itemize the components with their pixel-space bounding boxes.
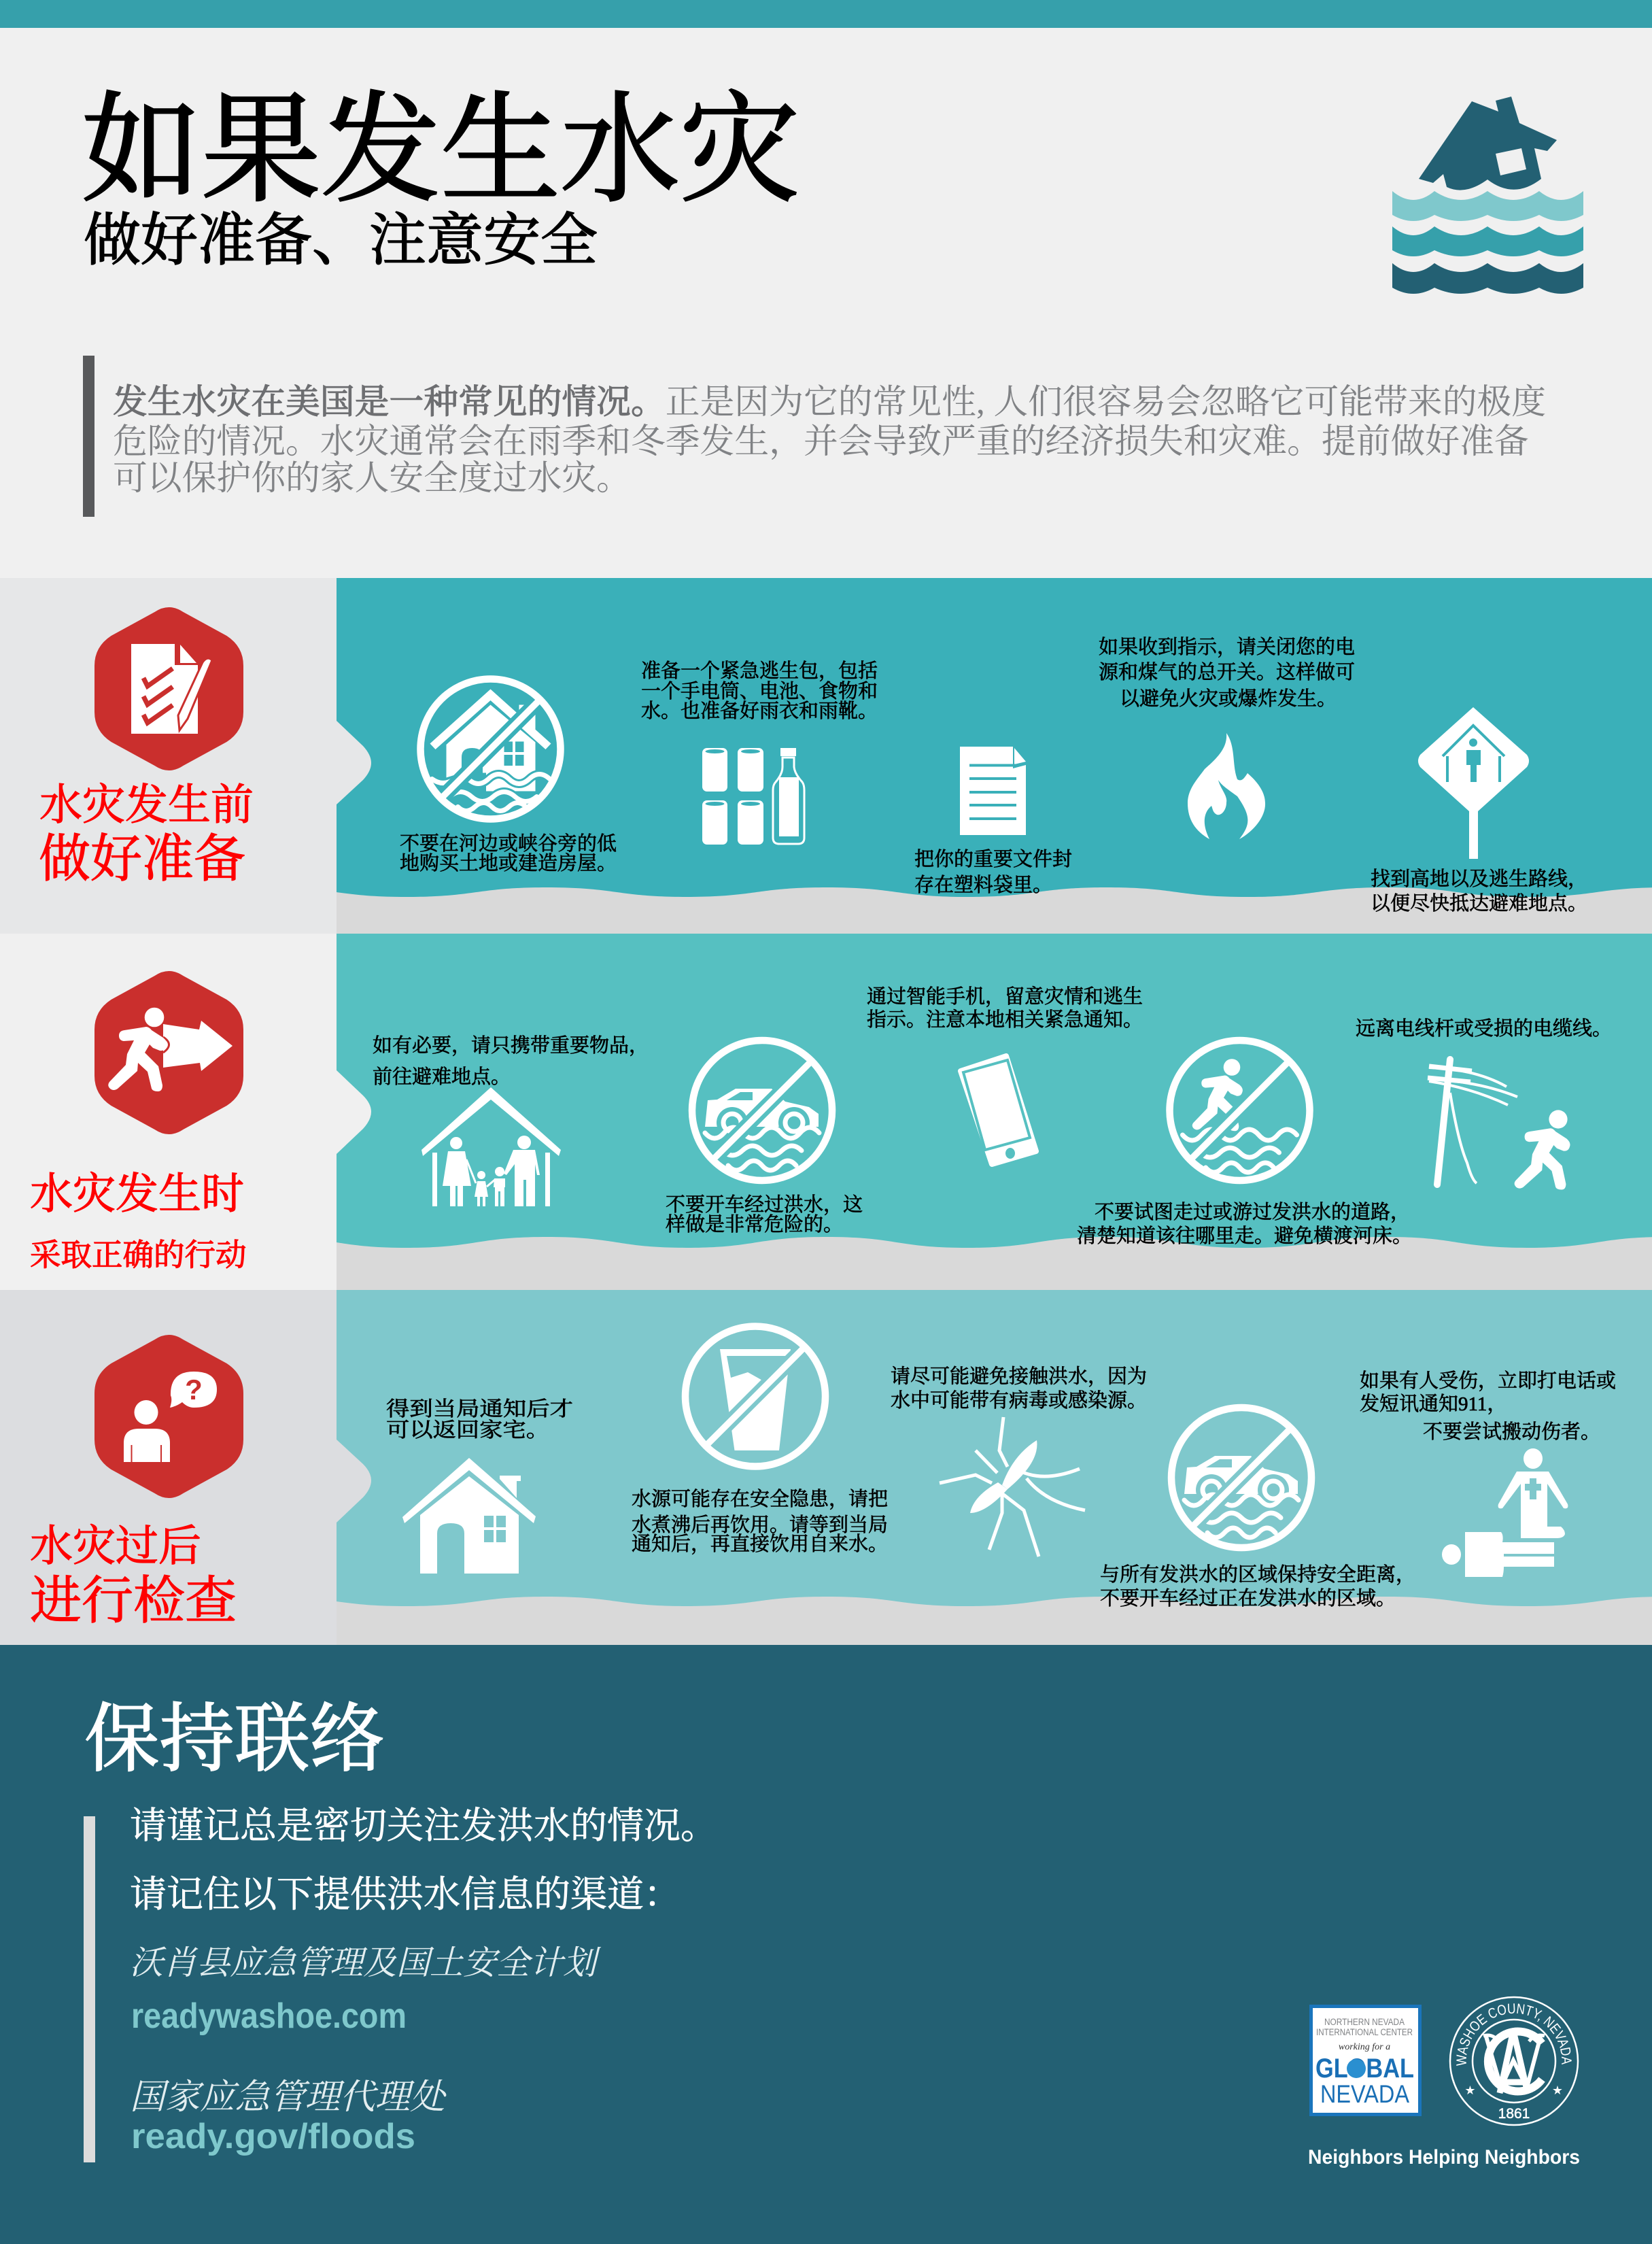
- subheading: 采取正确的行动: [30, 1238, 247, 1272]
- text: call 911: 不要尝试搬动伤者。: [1423, 1421, 1600, 1443]
- text: shut off utilities: 如果收到指示，请关闭您的电: [1099, 636, 1355, 658]
- text: do not build: 不要在河边或峡谷旁的低: [400, 833, 617, 855]
- icon: no driving: [1171, 1408, 1311, 1548]
- text: do not drive: 样做是非常危险的。: [666, 1213, 843, 1236]
- icon: evacuation sign: [1418, 707, 1529, 859]
- text: smartphone alerts: 指示。注意本地相关紧急通知。: [867, 1008, 1143, 1031]
- badge: person asking: ?: [185, 1374, 203, 1406]
- text: boil water: 通知后，再直接饮用自来水。: [632, 1533, 888, 1555]
- text: return home: 可以返回家宅。: [386, 1419, 549, 1442]
- footer heading: 保持联络: [84, 1698, 385, 1781]
- logo: Washoe County seal: ★: [1552, 2084, 1563, 2098]
- panel: after flood: [0, 1290, 1652, 1645]
- badge: person asking: [94, 1335, 243, 1498]
- heading large: 做好准备: [39, 831, 245, 888]
- text: stay away from power lines: 远离电线杆或受损的电缆线。: [1356, 1017, 1612, 1040]
- text: avoid flood water: 水中可能带有病毒或感染源。: [891, 1389, 1147, 1412]
- logo: Global Nevada: INTERNATIONAL CENTER: [1316, 2027, 1413, 2037]
- pointer notch: [337, 721, 371, 804]
- icon: smartphone: [961, 1056, 1036, 1164]
- text: stay clear of flood: 不要开车经过正在发洪水的区域。: [1100, 1587, 1396, 1610]
- source name: Washoe: 沃肖县应急管理及国土安全计划: [130, 1944, 602, 1982]
- intro paragraph: 可以保护你的家人安全度过水灾。: [113, 459, 631, 497]
- icon: document: [960, 747, 1026, 835]
- logo: Washoe County seal: [1449, 1996, 1579, 2126]
- logo: Washoe County seal: 1861: [1498, 2106, 1530, 2122]
- text: stay clear of flood: 与所有发洪水的区域保持安全距离，: [1100, 1564, 1415, 1586]
- pointer notch: [337, 1440, 371, 1523]
- icon: mosquito: [940, 1417, 1085, 1557]
- text: do not build: 地购买土地或建造房屋。: [400, 852, 617, 874]
- text: emergency kit: 水。也准备好雨衣和雨靴。: [641, 700, 878, 722]
- text: emergency kit: 一个手电筒、电池、食物和: [641, 680, 878, 702]
- panel: stay connected footer: [0, 1645, 1652, 2244]
- icon: house: [402, 1458, 536, 1574]
- ground wave: [266, 887, 1652, 934]
- icon: no drinking water: [685, 1326, 825, 1466]
- heading large: 进行检查: [30, 1573, 237, 1630]
- tagline: Neighbors Helping Neighbors: [1308, 2146, 1580, 2169]
- sources line: 请记住以下提供洪水信息的渠道：: [130, 1874, 681, 1915]
- text: return home: [386, 1398, 573, 1442]
- side panel: [0, 1290, 337, 1645]
- text: documents: 存在塑料袋里。: [914, 874, 1052, 896]
- text: high ground: 找到高地以及逃生路线，: [1371, 868, 1587, 890]
- badge: evacuate runner: [94, 971, 243, 1134]
- logo: Global Nevada: GLOBAL: [1315, 2054, 1414, 2084]
- intro accent bar: [83, 356, 94, 517]
- icon: no walking through floods: [1169, 1040, 1309, 1180]
- heading: 水灾过后: [30, 1523, 201, 1570]
- text: boil water: 水煮沸后再饮用。请等到当局: [632, 1514, 888, 1536]
- badge: checklist: [94, 607, 243, 770]
- subtitle: 做好准备、注意安全: [84, 209, 598, 273]
- text: do not walk: 不要试图走过或游过发洪水的道路，: [1095, 1202, 1410, 1223]
- pointer notch: [337, 1070, 371, 1154]
- band background: [337, 578, 1652, 934]
- logo: Global Nevada: [1311, 2006, 1419, 2115]
- text: documents: 把你的重要文件封: [914, 849, 1072, 870]
- text: high ground: 以便尽快抵达避难地点。: [1371, 892, 1587, 915]
- source name: FEMA: 国家应急管理代理处: [130, 2078, 449, 2117]
- logo: Global Nevada: NEVADA: [1320, 2080, 1409, 2108]
- text: shut off utilities: 源和煤气的总开关。这样做可: [1099, 661, 1355, 683]
- icon: first aid: [1442, 1448, 1568, 1577]
- heading: 水灾发生前: [39, 781, 254, 829]
- text: essentials: 前往避难地点。: [373, 1066, 511, 1088]
- band background: [337, 1290, 1652, 1645]
- text: call 911: 如果有人受伤，立即打电话或: [1360, 1370, 1616, 1392]
- band background: [337, 934, 1652, 1290]
- footer background: [0, 1645, 1652, 2244]
- title: 如果发生水灾: [82, 85, 799, 218]
- panel: before flood: [0, 578, 1652, 934]
- logo: Washoe County seal: WASHOE COUNTY, NEVADA: [1456, 2003, 1572, 2066]
- intro paragraph: 发生水灾在美国是一种常见的情况。正是因为它的常见性, 人们很容易会忽略它可能带来的极度: [113, 383, 1546, 421]
- link: readywashoe: readywashoe.com: [131, 1996, 407, 2036]
- ground wave: [266, 1237, 1652, 1290]
- heading: 水灾发生时: [30, 1170, 244, 1218]
- text: call 911: 发短讯通知911，: [1360, 1393, 1507, 1415]
- text: do not walk: 清楚知道该往哪里走。避免横渡河床。: [1077, 1225, 1412, 1247]
- icon: flooded house: [1392, 97, 1583, 294]
- reminder line: 请谨记总是密切关注发洪水的情况。: [130, 1805, 717, 1846]
- icon: no driving through floods: [692, 1040, 832, 1180]
- text: emergency kit: 准备一个紧急逃生包，包括: [641, 660, 878, 682]
- side panel: [0, 934, 337, 1290]
- side panel: [0, 578, 337, 934]
- icon: flame: [1188, 733, 1265, 839]
- icon: power line and person: [1428, 1059, 1570, 1190]
- text: return home: 得到当局通知后才: [386, 1398, 573, 1421]
- text: smartphone alerts: 通过智能手机，留意灾情和逃生: [867, 986, 1143, 1008]
- logo: Washoe County seal: ★: [1464, 2084, 1476, 2098]
- panel: during flood: [0, 934, 1652, 1290]
- icon: family shelter: [421, 1087, 561, 1206]
- ground wave: [266, 1597, 1652, 1645]
- icon: no building by river: [420, 679, 560, 819]
- link: ready.gov: ready.gov/floods: [131, 2117, 415, 2156]
- footer accent bar: [84, 1816, 95, 2162]
- text: do not drive: 不要开车经过洪水，这: [666, 1194, 863, 1216]
- text: essentials: 如有必要，请只携带重要物品，: [373, 1035, 649, 1057]
- text: avoid flood water: 请尽可能避免接触洪水，因为: [891, 1365, 1147, 1387]
- icon: supplies: [702, 748, 804, 845]
- logo: Global Nevada: working for a: [1339, 2042, 1390, 2052]
- text: boil water: 水源可能存在安全隐患，请把: [632, 1489, 888, 1510]
- logo: Global Nevada: NORTHERN NEVADA: [1324, 2017, 1405, 2027]
- intro paragraph: [113, 383, 1546, 497]
- top teal bar: [0, 0, 1652, 28]
- intro paragraph: 危险的情况。水灾通常会在雨季和冬季发生，并会导致严重的经济损失和灾难。提前做好准备: [113, 422, 1529, 460]
- text: shut off utilities: 以避免火灾或爆炸发生。: [1120, 687, 1337, 710]
